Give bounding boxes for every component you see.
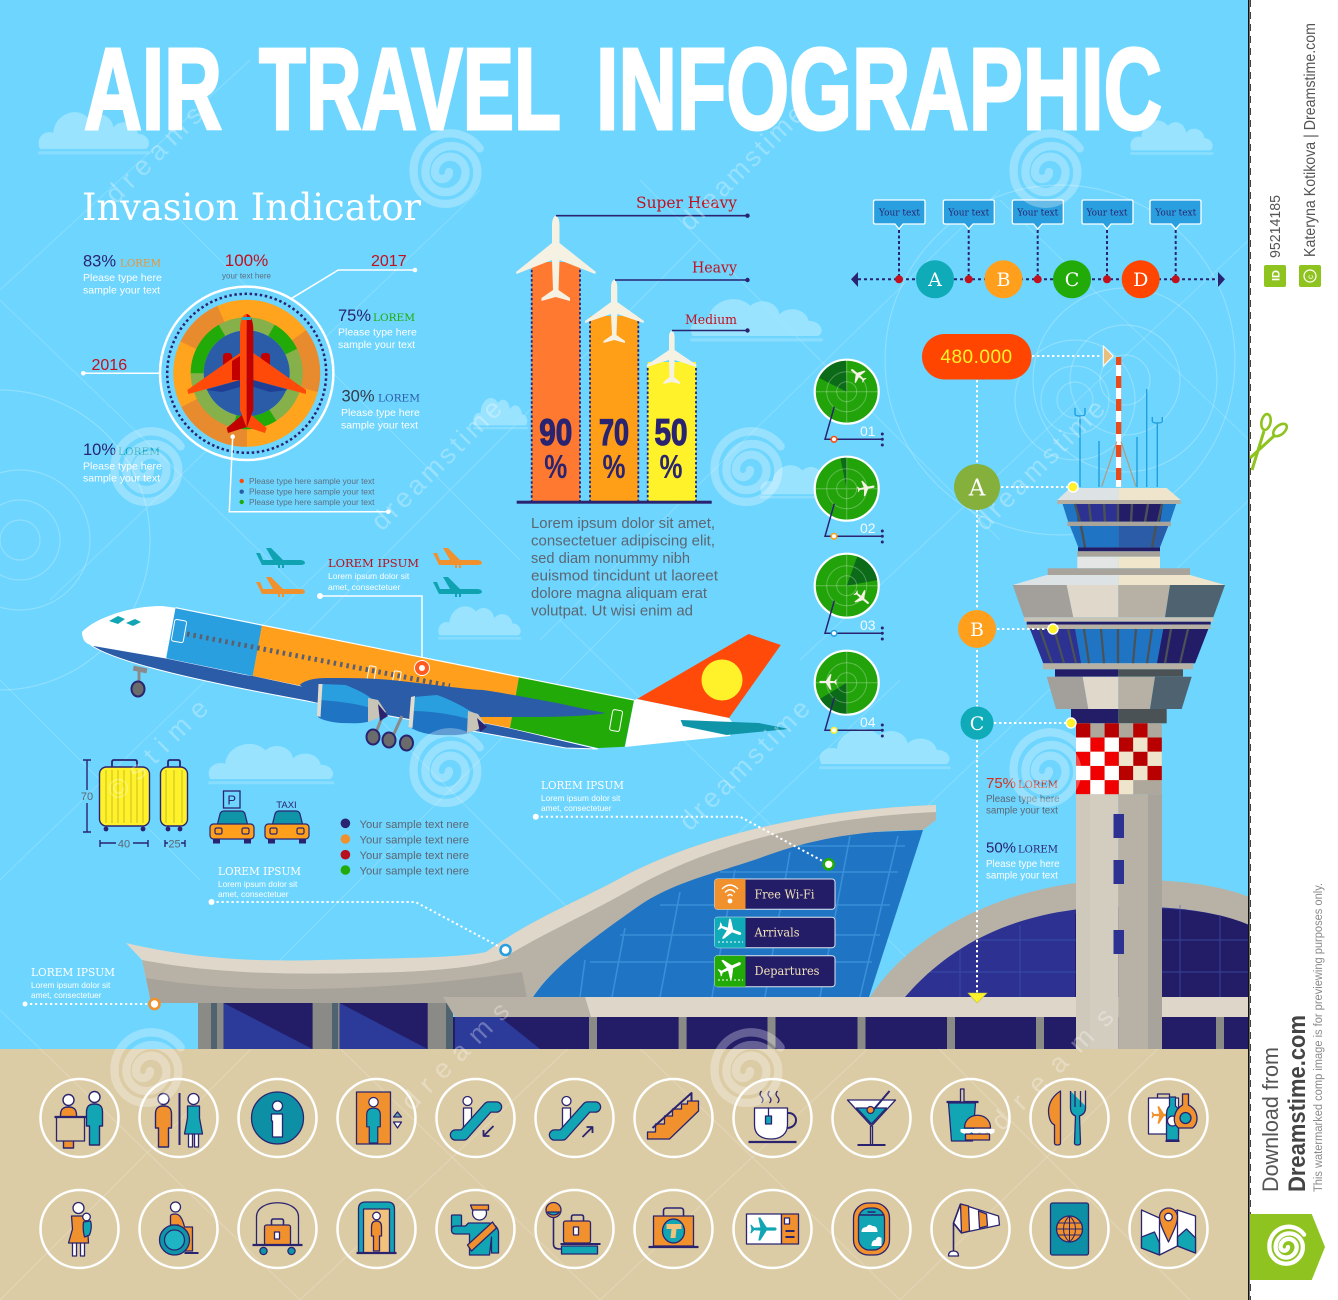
shaft [1076,794,1118,1049]
bar: medium 50%: % [660,448,682,485]
callout: roof lorem ipsum: Lorem ipsum dolor sit [541,793,621,803]
right dome [870,880,1249,1003]
stat: tower 75%: LOREM [1018,780,1058,791]
icon: information [238,1079,316,1157]
left canopy [126,943,528,1003]
stat: 30% lorem: 30% [342,388,375,406]
large suitcase [100,760,150,831]
tail fin [637,634,781,718]
stat: 100%: your text here [222,272,272,280]
donut chart: invasion indicator [160,287,333,460]
stat: tower 50% [986,840,1060,882]
stat: 10% lorem: sample your text [83,472,160,484]
title: TRAVEL [259,24,561,154]
label: medium [672,313,750,333]
bar: heavy 70%: 70 [599,412,629,453]
sign: arrivals: Arrivals [754,926,800,940]
icon: woman with baby [40,1190,118,1268]
mast [1102,357,1136,487]
icon: boarding pass [734,1190,812,1268]
marker b [958,610,1058,648]
main airplane [82,606,788,750]
legend: sample text: Your sample text nere [360,834,469,846]
stat: 83% lorem: LOREM [120,258,161,270]
bar: super heavy 90% [516,216,596,501]
stat: 10% lorem: Please type here [83,460,162,472]
icon: baggage cart [238,1190,316,1268]
bar chart: aircraft weight classes [516,216,712,504]
label: 2017: 2017 [371,253,407,270]
stat: 100%: 100% [225,251,268,270]
luggage sizes: 70 [81,791,93,803]
sign: free wi-fi: Free Wi-Fi [754,888,815,902]
stat: tower 50%: Please type here [986,859,1060,870]
stat: tower 50%: sample your text [986,870,1058,882]
taxi car [265,800,309,844]
callout: plane lorem ipsum: Lorem ipsum dolor sit [328,571,410,581]
label: 2016 [81,357,160,376]
stat: 10% lorem: 10% [83,441,116,459]
parking car: P [227,792,236,808]
text block: lorem paragraph: dolore magna aliquam erat [531,586,707,602]
terminal building [126,805,1249,1049]
stat: 83% lorem: Please type here [83,272,162,284]
small suitcase [160,760,188,831]
icon: map [1130,1190,1208,1268]
ground band [0,1049,1249,1300]
label: 2016: 2016 [92,357,127,374]
radar 01: 01 [860,423,876,439]
text block: lorem paragraph: consectetuer adipiscing elit, [531,534,715,550]
counter pill: 480.000 [922,334,1113,380]
watermark: dreams [395,996,515,1116]
timeline: a b c d: Your text [1154,208,1196,218]
clouds [38,112,1214,784]
luggage sizes [81,760,188,850]
timeline: a b c d: A [927,269,942,291]
callout marker [414,660,430,676]
title [84,24,1162,154]
margin: image id [1264,195,1286,287]
signs: airport information [715,879,835,987]
icon: security gate [338,1190,416,1268]
radar 04 [815,651,884,738]
icon: plane window [832,1190,910,1268]
callout: canopy lorem ipsum [208,865,510,955]
margin: author credit: c [1306,275,1315,279]
bar: heavy 70% [585,280,644,501]
engine 1 [317,684,388,723]
taxi car: TAXI [276,800,297,811]
callout: canopy lorem ipsum: Lorem ipsum dolor sit [218,879,298,889]
legend: sample text [341,818,469,878]
radar 03: 03 [860,617,876,633]
stat: tower 75% [986,775,1060,816]
margin: download from dreamstime: Dreamstime.com [1284,1015,1311,1192]
fuselage sections [82,606,176,658]
background sky [0,0,1249,1049]
stat: 75% lorem: Please type here [338,326,417,338]
sign: departures: Departures [754,964,820,978]
callout: canopy lorem ipsum: LOREM IPSUM [218,865,301,878]
label: heavy: Heavy [692,259,737,277]
marker b: B [970,619,984,641]
main cab roof [1048,568,1190,575]
watermark: dreamstime [365,393,508,536]
icon: security officer [436,1190,514,1268]
luggage sizes: 25 [168,838,181,850]
margin: author credit: Kateryna Kotikova | Dreamstime.com [1302,23,1319,257]
checker pattern [1076,723,1162,794]
antennas [1075,389,1162,487]
icon: baggage scale [536,1190,614,1268]
main cab facets [1013,585,1073,617]
stat: 83% lorem: 83% [83,252,116,270]
engine 2 [408,695,487,735]
icon: windsock [932,1190,1010,1268]
icon: wheelchair [140,1190,218,1268]
tailplane [681,720,788,735]
callout: roof lorem ipsum [533,779,834,869]
text boxes [874,200,1201,229]
stat: 100% [222,251,272,280]
stat: tower 75%: Please type here [986,794,1060,805]
legend: sample text: Your sample text nere [360,850,469,862]
icon: scissors [1250,413,1289,470]
bar: heavy 70%: % [602,448,626,485]
label: super heavy: Super Heavy [636,194,737,212]
label: 2017 [292,253,417,298]
timeline: a b c d: Your text [1016,208,1058,218]
icon: escalator down [436,1079,514,1157]
stat: 30% lorem [341,388,420,432]
stat: 30% lorem: Please type here [341,407,420,419]
label: super heavy [556,194,750,218]
callout: plane lorem ipsum [317,556,422,660]
radar 04: 04 [860,714,876,730]
small planes [256,548,482,597]
icon: escalator up [536,1079,614,1157]
stat: 30% lorem: sample your text [341,420,418,432]
text block: lorem paragraph: Lorem ipsum dolor sit amet, [531,516,715,532]
text block: lorem paragraph [531,516,718,620]
text block: lorem paragraph: volutpat. Ut wisi enim ad [531,604,693,620]
radar 02 [815,457,884,544]
callout: plane lorem ipsum: amet, consectetuer [328,582,400,592]
cockpit windows [109,616,141,626]
bar: super heavy 90%: 90 [539,412,572,453]
stat: tower 50%: 50% [986,840,1016,856]
legend: indicator bullets: Please type here sample your text [249,497,375,507]
stat: 75% lorem: LOREM [373,312,415,324]
margin: logo pennant [1250,1214,1325,1280]
stat: 10% lorem: LOREM [118,446,160,458]
label: medium: Medium [685,313,737,328]
margin: author credit [1299,23,1321,287]
icon: elevator [338,1079,416,1157]
callout: left lorem ipsum: amet, consectetuer [31,990,102,1000]
doors [171,619,623,732]
bar: medium 50% [647,331,697,501]
landing gear [132,666,147,696]
stat: tower 75%: sample your text [986,806,1058,816]
watermark: dreams [99,100,209,209]
dimensions [83,760,91,832]
stat: 75% lorem [338,307,417,351]
stat: 83% lorem [83,252,162,296]
legend: indicator bullets: Please type here sample your text [249,487,375,497]
legend: indicator bullets [229,434,391,514]
marker c [960,706,1076,740]
label: heavy [615,259,750,282]
luggage sizes: 40 [118,838,130,850]
watermark: dreamstime [968,393,1111,536]
stat: 75% lorem: 75% [338,307,371,325]
callout: left lorem ipsum: LOREM IPSUM [31,966,115,979]
curved roof [486,805,936,997]
icon: reception [40,1079,118,1157]
windows [187,634,450,686]
callout: canopy lorem ipsum: amet, consectetuer [218,889,289,899]
watermark: dreamstime [673,693,816,836]
timeline: a b c d: C [1065,269,1079,291]
main cab glass [1030,629,1208,663]
bar: medium 50%: 50 [654,412,688,453]
stat: 83% lorem: sample your text [83,284,160,296]
stat: tower 75%: 75% [986,775,1016,792]
watermark: dreams [985,1002,1119,1136]
watermark: dreamstime [673,98,811,236]
bar: super heavy 90%: % [544,448,567,485]
parking car [210,791,254,844]
stat: 75% lorem: sample your text [338,339,415,351]
text block: lorem paragraph: sed diam nonummy nibh [531,551,690,567]
timeline: a b c d: Your text [947,208,989,218]
tail cone [625,699,735,747]
timeline: a b c d [851,200,1225,298]
margin: cut line [1248,0,1250,1300]
timeline: a b c d: B [997,269,1010,291]
timeline: a b c d: Your text [1086,208,1128,218]
legend: sample text: Your sample text nere [360,866,469,878]
icon: bag x-ray [634,1190,712,1268]
callout: roof lorem ipsum: amet, consectetuer [541,803,612,813]
radar 01 [815,360,884,446]
watermark: ©stime [101,693,214,806]
icon: coffee [734,1079,812,1157]
marker c: C [970,713,984,735]
watermark [99,98,1119,1136]
stat: 10% lorem [83,441,162,484]
lower roof strip [453,1017,1249,1049]
glass facade [533,830,923,997]
callout: left lorem ipsum: Lorem ipsum dolor sit [31,980,111,990]
icon panel: airport services [40,1079,1208,1268]
icon: cutlery [1030,1079,1108,1157]
radar 03 [815,554,884,640]
marker a: A [968,476,986,502]
columns and windows [198,1003,453,1049]
icon: restrooms [140,1079,218,1157]
callout: left lorem ipsum [22,966,160,1009]
callout: plane lorem ipsum: LOREM IPSUM [328,556,419,570]
margin: image id: 95214185 [1267,195,1284,258]
icon: soda and burger [932,1079,1010,1157]
bands [1024,617,1213,622]
marker a [954,464,1078,510]
margin: download from dreamstime: This watermarked comp image is for previewing purposes only. [1313,883,1325,1192]
stat: tower 50%: LOREM [1018,844,1058,856]
stat: 30% lorem: LOREM [378,392,420,404]
lower facets [1047,677,1088,709]
callout: roof lorem ipsum: LOREM IPSUM [541,779,624,792]
wing [300,678,606,717]
upper cab [1057,488,1118,500]
title: AIR [84,24,222,154]
radar 02: 02 [860,520,876,536]
control tower [1013,357,1225,1049]
icon: duty free [1130,1079,1208,1157]
counter pill: 480.000: 480.000 [940,347,1013,368]
margin: image id: ID [1270,270,1282,281]
legend: sample text: Your sample text nere [360,819,469,831]
icon: martini [832,1079,910,1157]
legend: indicator bullets: Please type here sample your text [249,476,375,486]
icon: stairs [634,1079,712,1157]
dotted vertical leader [968,380,987,1003]
margin: download from dreamstime [1258,883,1325,1192]
text block: lorem paragraph: euismod tincidunt ut laoreet [531,568,718,584]
timeline: a b c d: Your text [878,208,920,218]
timeline: a b c d: D [1133,269,1148,291]
heading: invasion indicator: Invasion Indicator [82,186,421,229]
icon: passport [1030,1190,1108,1268]
margin: download from dreamstime: Download from [1258,1047,1283,1192]
